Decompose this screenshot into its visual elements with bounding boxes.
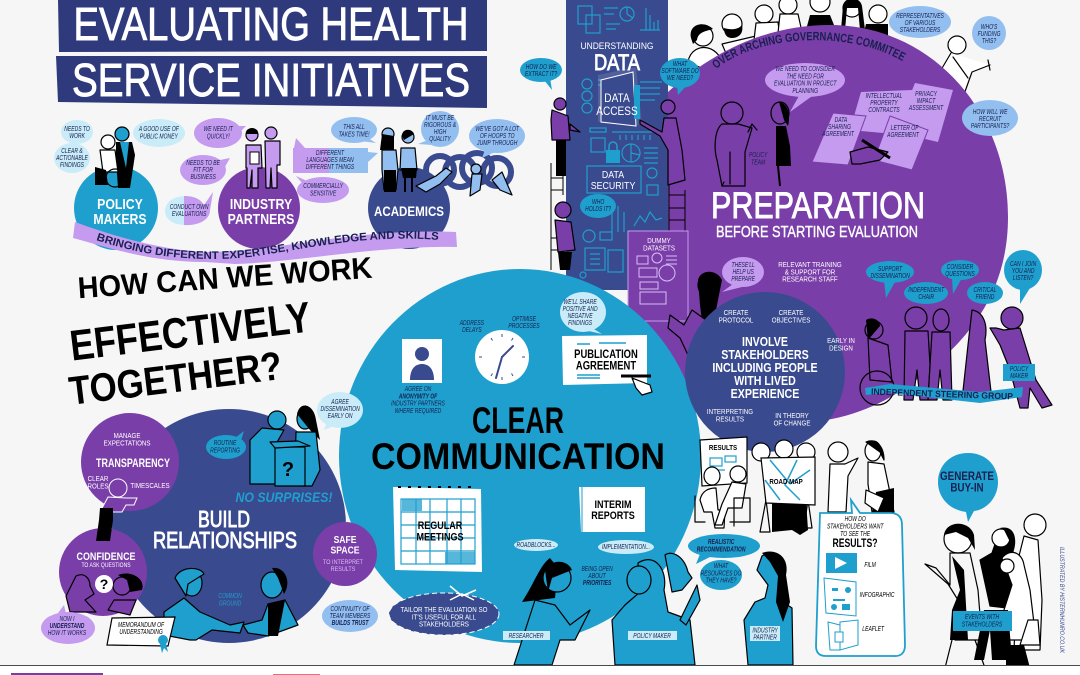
- bubble: public money: [133, 119, 185, 147]
- heading: industry partners: PARTNERS: [228, 211, 294, 227]
- bubble: hoops to jump: OF HOOPS TO: [480, 132, 515, 140]
- bubble: rigorous: [418, 111, 459, 147]
- bubble: now I understand: NOW I: [59, 615, 75, 623]
- heading: data: DATA: [594, 50, 640, 75]
- callout: different languages: [293, 138, 378, 173]
- bubble: needs to work: [61, 120, 93, 144]
- circle: confidence: TO ASK QUESTIONS: [81, 563, 131, 569]
- icon: leaflet: [828, 620, 858, 650]
- heading: results: RESULTS?: [832, 538, 878, 550]
- bubble: implementation: [598, 540, 654, 554]
- circle: safe space: RESULTS: [331, 567, 355, 573]
- panel: academics: [331, 111, 525, 249]
- bubble: realistic recommendation: [688, 534, 760, 564]
- documents: [812, 83, 953, 170]
- label: policy maker: POLICY: [1010, 365, 1029, 373]
- heading: clear communication: COMMUNICATION: [371, 436, 665, 477]
- bubble: what resources: [700, 560, 742, 590]
- bubble: continuity of team: TEAM MEMBERS: [330, 612, 370, 620]
- bubble: continuity of team: BUILDS TRUST: [332, 619, 369, 627]
- bubble: routine reporting: ROUTINE: [214, 439, 237, 447]
- certificate: memorandum of understanding: [107, 617, 175, 653]
- bubble: what resources: RESOURCES DO: [701, 570, 742, 578]
- text: being open: ABOUT: [588, 572, 607, 580]
- callout: different languages: DIFFERENT: [316, 149, 345, 157]
- text: optimise processes: OPTIMISE: [512, 315, 537, 323]
- icon: hoops: [426, 153, 511, 187]
- documents: AGREEMENT: [821, 130, 855, 138]
- bubble: takes time: THIS ALL: [343, 123, 365, 131]
- steering group bubbles: DISSEMINATION: [870, 272, 910, 280]
- figure: man with clear roles: [96, 479, 137, 541]
- icon: regular meetings calendar: [393, 487, 482, 572]
- circle: transparency: CLEAR: [88, 476, 108, 483]
- panel: understanding data column: [520, 0, 700, 321]
- text: no surprises: NO SURPRISES!: [236, 489, 333, 505]
- figures: two partners: [246, 127, 280, 188]
- icon: infographic: [824, 578, 856, 616]
- figure: policy team man: [715, 102, 757, 186]
- bubble: agree dissemination: AGREE: [330, 398, 350, 406]
- bubble: realistic recommendation: REALISTIC: [708, 538, 735, 546]
- bubble: commercially sensitive: [296, 176, 349, 203]
- bubble: agree dissemination: DISSEMINATION: [320, 405, 360, 413]
- figure: worker right: [640, 100, 685, 185]
- panel: dummy datasets: [628, 231, 688, 321]
- circle: safe space: SPACE: [331, 545, 360, 557]
- bubble: representatives: [889, 6, 951, 38]
- steering group bubbles: LISTEN?: [1013, 274, 1034, 282]
- bubble: representatives: STAKEHOLDERS: [900, 26, 940, 34]
- bubble: these'll help us prepare: [722, 257, 764, 292]
- text: how do stakeholders: HOW DO: [845, 515, 866, 523]
- figures: two academics: [380, 128, 417, 192]
- documents: ASSESSMENT: [908, 104, 944, 112]
- heading: industry partners: INDUSTRY: [230, 196, 292, 212]
- figure: industry partner: PARTNER: [753, 634, 777, 642]
- figure: researcher: [514, 558, 590, 665]
- bubble: hoops to jump: WE'VE GOT A LOT: [475, 125, 520, 133]
- bubble: routine reporting: [206, 431, 246, 459]
- bubble: who holds it: [580, 194, 616, 218]
- panel: dummy datasets: DUMMY: [647, 238, 671, 245]
- circle: transparency: [81, 413, 179, 511]
- bubble: fit for business: [180, 155, 230, 185]
- heading: involve stakeholders: EXPERIENCE: [731, 386, 799, 401]
- heading: how can we work effectively together: TOGETHER?: [67, 344, 284, 414]
- bubble: how do we extract: [520, 58, 562, 90]
- callout: tailor the evaluation: TAILOR THE EVALUATION SO: [401, 607, 487, 614]
- panel: road map group: [752, 440, 815, 535]
- documents: LETTER OF: [891, 124, 919, 132]
- heading: involve stakeholders: INCLUDING PEOPLE: [712, 360, 818, 375]
- text: optimise processes: PROCESSES: [508, 322, 540, 330]
- bubble: share findings: POSITIVE AND: [563, 305, 598, 313]
- text: how do stakeholders: STAKEHOLDERS WANT: [827, 523, 884, 531]
- circle: transparency: ROLES: [88, 483, 109, 490]
- text: interpreting results: RESULTS: [716, 416, 744, 423]
- text: theory of change: OF CHANGE: [774, 420, 811, 427]
- icon: regular meetings calendar: MEETINGS: [416, 532, 464, 544]
- bubble: who holds it: WHO: [592, 198, 604, 206]
- callout: tailor the evaluation: STAKEHOLDERS: [419, 621, 469, 629]
- bubble: clear findings: ACTIONABLE: [55, 154, 89, 162]
- figures: box with question mark: [250, 405, 320, 486]
- bubble: share findings: FINDINGS: [568, 319, 592, 327]
- label: policy maker: [1003, 364, 1035, 381]
- bubble: roadblocks: ROADBLOCKS...: [516, 541, 556, 549]
- heading: involve stakeholders: INVOLVE: [742, 334, 788, 349]
- bubble: generate buy-in: [938, 453, 998, 522]
- bubble: rigorous: RIGOROUS &: [424, 121, 456, 129]
- documents: IMPACT: [917, 97, 936, 105]
- label: events with stakeholders: STAKEHOLDERS: [962, 621, 1002, 629]
- steering group bubbles: QUESTIONS: [945, 270, 975, 278]
- bubble: conduct own evaluations: CONDUCT OWN: [170, 203, 209, 211]
- text: common ground: COMMON: [218, 592, 242, 600]
- steering group bubbles: INDEPENDENT: [908, 286, 945, 294]
- figure: industry partner: [744, 552, 793, 665]
- bubble: representatives: OF VARIOUS: [905, 19, 935, 27]
- bubble: continuity of team: [322, 600, 378, 632]
- heading: clear communication: CLEAR: [472, 400, 564, 441]
- bubble: implementation: IMPLEMENTATION...: [602, 543, 650, 551]
- panel: dummy datasets: DATASETS: [643, 245, 675, 253]
- bubble: consider need for evaluation: PLANNING: [792, 87, 818, 95]
- text: being open: BEING OPEN: [581, 565, 613, 573]
- text: address delays: DELAYS: [462, 326, 482, 334]
- subheading: before starting: BEFORE STARTING EVALUATION: [716, 224, 918, 241]
- bubble: clear findings: [54, 143, 90, 173]
- text: address delays: ADDRESS: [459, 319, 484, 327]
- heading: policy makers: MAKERS: [93, 211, 147, 227]
- icon: interim reports: REPORTS: [591, 510, 635, 522]
- panel: policy makers: [54, 119, 185, 250]
- bubble: representatives: REPRESENTATIVES: [896, 12, 944, 20]
- bubble: fit for business: BUSINESS: [190, 173, 216, 181]
- documents: CONTRACTS: [868, 106, 900, 114]
- panel: publication agreement: [562, 335, 652, 395]
- heading: academics: ACADEMICS: [374, 203, 444, 219]
- documents: PRIVACY: [915, 90, 938, 98]
- decorative data sketches: [578, 6, 662, 278]
- figure: policy maker with hijab: [612, 553, 700, 665]
- bubble: consider need for evaluation: EVALUATION IN PROJECT: [774, 80, 837, 88]
- bubble: takes time: TAKES TIME!: [339, 131, 370, 139]
- bubble: rigorous: QUALITY: [429, 135, 452, 143]
- bubble: who's funding: [972, 16, 1006, 50]
- documents: SHARING: [828, 123, 851, 131]
- panel: clear communication: [339, 269, 701, 665]
- steering group bubbles: CHAIR: [918, 293, 935, 301]
- heading: how can we work effectively together: EFFECTIVELY: [67, 293, 313, 371]
- icon: interim reports: [579, 487, 645, 532]
- panel: publication agreement: PUBLICATION: [574, 348, 638, 361]
- panel: build relationships: [112, 405, 346, 643]
- bubble: continuity of team: CONTINUITY OF: [331, 605, 370, 613]
- heading: how can we work effectively together: HOW CAN WE WORK: [77, 252, 374, 305]
- figure: worker left: [551, 98, 580, 176]
- circle: transparency: MANAGE: [114, 433, 141, 440]
- bubble: takes time: [331, 117, 377, 143]
- figures: jumping through hoops: [416, 164, 512, 196]
- bubble: share findings: [560, 292, 606, 334]
- icon: anonymous person card: [402, 339, 442, 383]
- figures: two people asking: [66, 573, 143, 615]
- label: film: FILM: [864, 561, 877, 569]
- figures: man and wheelchair user: [95, 127, 135, 188]
- heading: preparation: PREPARATION: [711, 185, 925, 226]
- icon: data access door: ACCESS: [596, 105, 638, 118]
- documents: INTELLECTUAL: [866, 92, 902, 100]
- panel: results flipchart and seated people: RESULTS: [709, 445, 738, 452]
- label: data security: SECURITY: [591, 180, 636, 192]
- panel: industry partners: [180, 118, 349, 249]
- bubble: who holds it: HOLDS IT?: [585, 205, 612, 213]
- bubble: fit for business: NEEDS TO BE: [186, 159, 221, 167]
- bubble: share findings: NEGATIVE: [568, 312, 593, 320]
- circle: transparency: TRANSPARENCY: [96, 458, 170, 470]
- icon: interim reports: INTERIM: [595, 499, 632, 511]
- heading: clear communication: [371, 400, 665, 477]
- bubble: how do we extract: EXTRACT IT?: [525, 70, 558, 78]
- label: leaflet: LEAFLET: [862, 625, 885, 633]
- bubble: hoops to jump: JUMP THROUGH: [476, 139, 518, 147]
- bubble: what software: [660, 58, 700, 95]
- arc heading: governance committee: OVER ARCHING GOVERNANCE COMMITEE: [712, 32, 906, 68]
- figures: box with question mark: ?: [282, 459, 294, 481]
- bubble: now I understand: [41, 605, 95, 644]
- text: relevant training: & SUPPORT FOR: [785, 269, 835, 276]
- steering group bubbles: YOU AND: [1012, 267, 1035, 275]
- label: researcher: [503, 631, 550, 640]
- text: anonymity: ANONYMITY OF: [398, 393, 437, 401]
- text: theory of change: IN THEORY: [775, 413, 809, 420]
- bubble: consider need for evaluation: THE NEED FOR: [787, 73, 824, 81]
- bubble: what resources: WHAT: [714, 562, 729, 570]
- panel: road map group: ROAD MAP: [769, 479, 803, 486]
- text: how do stakeholders: TO SEE THE: [840, 530, 871, 538]
- bubble: what software: WE NEED?: [667, 74, 694, 82]
- text: create objectives: CREATE: [779, 310, 804, 317]
- figure: policy team woman: [771, 102, 791, 186]
- text: interpreting results: INTERPRETING: [707, 409, 753, 416]
- bubble: now I understand: HOW IT WORKS: [48, 629, 86, 637]
- icon: regular meetings calendar: REGULAR: [418, 520, 463, 532]
- documents: AGREEMENT: [886, 131, 920, 139]
- circle: safe space: SAFE: [334, 534, 357, 546]
- label: events with stakeholders: EVENTS WITH: [965, 613, 1000, 621]
- bubble: need it quickly: WE NEED IT: [204, 125, 234, 133]
- steering group bubbles: [866, 250, 1042, 304]
- bubble: fit for business: FIT FOR: [193, 166, 213, 174]
- icon: ladders: [551, 163, 685, 270]
- bubble: rigorous: IT MUST BE: [426, 114, 455, 122]
- text: common ground: GROUND: [219, 600, 242, 608]
- bubble: these'll help us prepare: HELP US: [732, 268, 754, 276]
- certificate: memorandum of understanding: MEMORANDUM OF: [118, 621, 164, 629]
- bubble: generate buy-in: BUY-IN: [950, 482, 984, 495]
- bubble: realistic recommendation: RECOMMENDATION: [697, 546, 746, 554]
- steering group bubbles: CAN I JOIN: [1010, 260, 1037, 268]
- icon: data access door: [596, 67, 642, 126]
- bubble: who's funding: THIS?: [982, 37, 997, 45]
- text: anonymity: AGREE ON: [404, 385, 432, 393]
- bubble: need it quickly: QUICKLY!: [207, 133, 230, 141]
- bubble: needs to work: NEEDS TO: [64, 125, 90, 133]
- label: data security: DATA: [602, 169, 625, 181]
- bubble: recruit participants: RECRUIT: [979, 115, 1002, 123]
- bubble: what software: SOFTWARE DO: [661, 67, 699, 75]
- text: create protocol: CREATE: [724, 310, 749, 317]
- steering group bubbles: CRITICAL: [974, 286, 996, 294]
- circle: confidence: CONFIDENCE: [76, 551, 136, 563]
- heading: understanding: UNDERSTANDING: [580, 41, 654, 52]
- bubble: rigorous: HIGH: [434, 128, 447, 136]
- label: events with stakeholders: [953, 611, 1012, 631]
- bubble: conduct own evaluations: [165, 192, 213, 225]
- steering group bubbles: FRIEND: [976, 293, 995, 301]
- panel: results flipchart and seated people: [695, 437, 750, 528]
- bubble: clear findings: FINDINGS: [60, 161, 84, 169]
- figures: steering group: [860, 307, 1052, 408]
- callout: tailor the evaluation: IT'S USEFUL FOR ALL: [412, 614, 476, 621]
- bubble: agree dissemination: EARLY ON: [328, 412, 353, 420]
- callout: different languages: DIFFERENT THINGS: [306, 163, 354, 171]
- icon: question mark: ?: [100, 576, 108, 592]
- steering group bubbles: SUPPORT: [878, 265, 903, 273]
- bubble: conduct own evaluations: EVALUATIONS: [172, 210, 206, 218]
- documents: DATA: [835, 116, 847, 124]
- label: policy maker: [628, 631, 677, 640]
- figures: stakeholder event group: [925, 514, 1046, 670]
- bubble: routine reporting: REPORTING: [210, 447, 240, 455]
- figure: woman on ladder: [555, 202, 575, 270]
- bubble: now I understand: UNDERSTAND: [50, 622, 85, 630]
- bubble: recruit participants: [962, 100, 1018, 136]
- bubble: how do we extract: HOW DO WE: [526, 63, 557, 71]
- panel: preparation: [646, 6, 1053, 420]
- bubble: consider need for evaluation: [765, 63, 845, 112]
- bubble: generate buy-in: GENERATE: [940, 470, 994, 483]
- icon: committee members: [688, 0, 888, 70]
- panel: involve stakeholders: [685, 292, 855, 452]
- ribbon: independent steering group: INDEPENDENT STEERING GROUP: [871, 387, 1013, 401]
- text: relevant training: RESEARCH STAFF: [782, 276, 838, 284]
- figure: bearded man pointing up: [668, 272, 722, 355]
- bubble: commercially sensitive: SENSITIVE: [310, 190, 337, 198]
- label: policy team: TEAM: [751, 159, 766, 167]
- bubble: these'll help us prepare: PREPARE: [731, 275, 756, 283]
- figure: industry partner: INDUSTRY: [752, 627, 779, 635]
- text: early in design: DESIGN: [829, 345, 853, 352]
- heading: involve stakeholders: STAKEHOLDERS: [721, 347, 809, 362]
- icon: padlock: [606, 142, 620, 163]
- bubble: public money: PUBLIC MONEY: [140, 133, 179, 141]
- icon: clock: [475, 330, 529, 384]
- label: infographic: INFOGRAPHIC: [860, 591, 895, 599]
- label: policy maker: MAKER: [1010, 372, 1029, 380]
- figures: handshake: [164, 568, 298, 640]
- text: create protocol: PROTOCOL: [719, 317, 754, 324]
- text: being open: PRIORITIES: [583, 579, 611, 587]
- icon: film: [826, 553, 857, 573]
- circle: transparency: EXPECTATIONS: [104, 440, 151, 447]
- heading: how can we work effectively together: [67, 252, 374, 414]
- ribbon: bringing different expertise: BRINGING DIFFERENT EXPERTISE, KNOWLEDGE AND SKILLS: [96, 230, 438, 259]
- bubble: agree dissemination: [317, 392, 363, 430]
- figures: man and woman in discussion: [828, 441, 894, 512]
- heading: build relationships: RELATIONSHIPS: [153, 527, 297, 553]
- label: policy maker: POLICY MAKER: [633, 632, 671, 640]
- bubble: hoops to jump: [469, 119, 525, 158]
- callout: different languages: LANGUAGES MEAN: [306, 156, 354, 164]
- text: anonymity: INDUSTRY PARTNERS: [391, 400, 445, 408]
- heading: build relationships: BUILD: [198, 506, 250, 532]
- text: anonymity: WHERE REQUIRED: [395, 407, 442, 415]
- certificate: memorandum of understanding: UNDERSTANDING: [119, 628, 163, 636]
- bubble: commercially sensitive: COMMERCIALLY: [303, 182, 344, 190]
- bubble: what resources: THEY HAVE?: [706, 577, 737, 585]
- figure: man pointing: [938, 36, 990, 100]
- bubble: consider need for evaluation: WE NEED TO CONSIDER: [775, 65, 836, 73]
- bubble: share findings: WE'LL SHARE: [563, 298, 597, 306]
- bubble: recruit participants: PARTICIPANTS?: [971, 122, 1010, 130]
- circle: transparency: TIMESCALES: [130, 483, 170, 490]
- bubble: recruit participants: HOW WILL WE: [973, 108, 1008, 116]
- documents: PROPERTY: [870, 99, 899, 107]
- bubble: what software: WHAT: [673, 60, 688, 68]
- circle: safe space: [313, 522, 377, 586]
- label: policy team: POLICY: [749, 151, 768, 159]
- circle: safe space: TO INTERPRET: [323, 560, 363, 566]
- text: early in design: EARLY IN: [827, 338, 855, 345]
- bubble: roadblocks: [514, 539, 558, 551]
- label: researcher: RESEARCHER: [509, 632, 544, 640]
- text: relevant training: RELEVANT TRAINING: [778, 262, 842, 269]
- circle: confidence: [59, 528, 147, 616]
- title banner 2: SERVICE INITIATIVES: [72, 54, 470, 106]
- heading: involve stakeholders: WITH LIVED: [734, 373, 796, 388]
- steering group bubbles: CONSIDER: [947, 263, 974, 271]
- bubble: public money: A GOOD USE OF: [138, 125, 179, 133]
- heading: policy makers: POLICY: [97, 196, 143, 212]
- bubble: clear findings: CLEAR &: [61, 147, 83, 155]
- callout: tailor the evaluation: [389, 586, 499, 635]
- bubble: who's funding: FUNDING: [978, 30, 1001, 38]
- bubble: these'll help us prepare: THESE'LL: [732, 261, 755, 269]
- bubble: who's funding: WHO'S: [981, 23, 997, 31]
- panel: publication agreement: AGREEMENT: [576, 360, 637, 373]
- ribbon: bringing different expertise: [73, 222, 457, 264]
- footer band: [0, 665, 1080, 675]
- bubble: need it quickly: [194, 118, 246, 148]
- text: create objectives: OBJECTIVES: [772, 317, 811, 324]
- panel: how stakeholders want results: [816, 500, 905, 656]
- icon: data access door: DATA: [604, 92, 630, 105]
- bubble: needs to work: WORK: [69, 132, 86, 140]
